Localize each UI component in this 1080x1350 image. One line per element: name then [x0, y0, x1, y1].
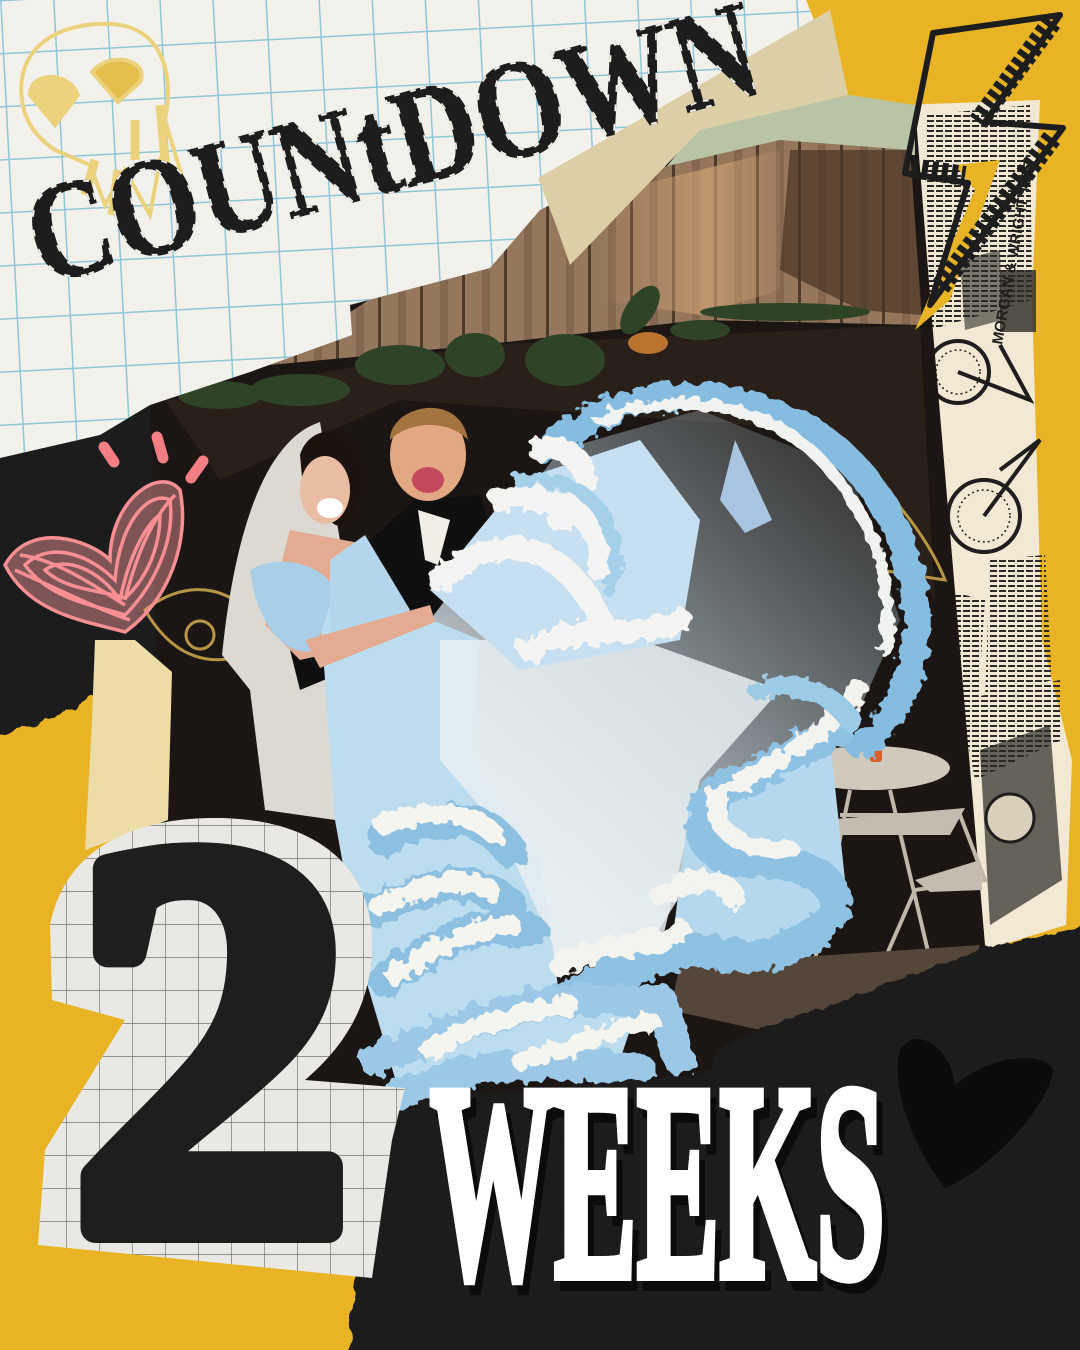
lower dress blue panel: [670, 740, 845, 960]
veil: [222, 422, 345, 820]
icon: black scribble heart: [898, 1039, 1053, 1188]
sheer tulle fan: [430, 410, 900, 960]
heading: number 2: 2: [72, 730, 352, 1350]
ground: [670, 945, 980, 1030]
icon: melting skull doodle: [21, 24, 183, 215]
newspaper ad blocks: [960, 250, 1062, 925]
panel: black torn paper bottom right: [345, 920, 1080, 1350]
gold wall drawing: [145, 440, 945, 660]
bodice: [330, 535, 410, 660]
panel: black torn paper left: [0, 385, 240, 740]
bright skirt centre: [440, 640, 780, 960]
bicycle illustrations: [927, 341, 1040, 842]
icon: lightning bolt: [905, 15, 1063, 330]
greenery garland: [178, 279, 870, 409]
bride face: [300, 456, 350, 524]
bride hair: [300, 431, 362, 526]
panel: masking tape lower left: [85, 640, 172, 850]
bride arm over dress: [305, 605, 435, 668]
shoulder sleeve: [250, 562, 335, 652]
brown wall: [165, 325, 935, 600]
groom mouth: [412, 467, 444, 493]
groom face: [390, 409, 466, 501]
bride torso: [265, 530, 395, 660]
dress ruffles: [375, 396, 917, 1095]
groom hair: [390, 408, 468, 440]
groom suit: [290, 495, 500, 690]
blue dress body: [320, 599, 640, 1095]
newspaper headline: MORGAN & WRIGHT TIRE: [989, 159, 1038, 346]
upper dress gathered area: [430, 440, 700, 670]
photo wall: [150, 100, 985, 1120]
fence: [270, 140, 922, 365]
icon: pink scribble heart: [5, 437, 203, 632]
newspaper fine print blocks: [925, 105, 1062, 780]
fence right shadow: [780, 150, 922, 315]
foot and shoe: [720, 440, 772, 533]
photo: wedding couple: [145, 95, 985, 1120]
panel: number paper cutout: [38, 818, 405, 1278]
bride mouth: [317, 498, 343, 518]
sky and tree: [640, 95, 915, 200]
panel: vintage newspaper strip: [900, 100, 1072, 960]
patio table and chairs: [790, 742, 985, 970]
panel: graph paper torn top left: [0, 0, 847, 458]
tape: beige strip top: [538, 10, 848, 265]
groom shirt: [418, 510, 450, 565]
fence highlight: [600, 150, 780, 315]
